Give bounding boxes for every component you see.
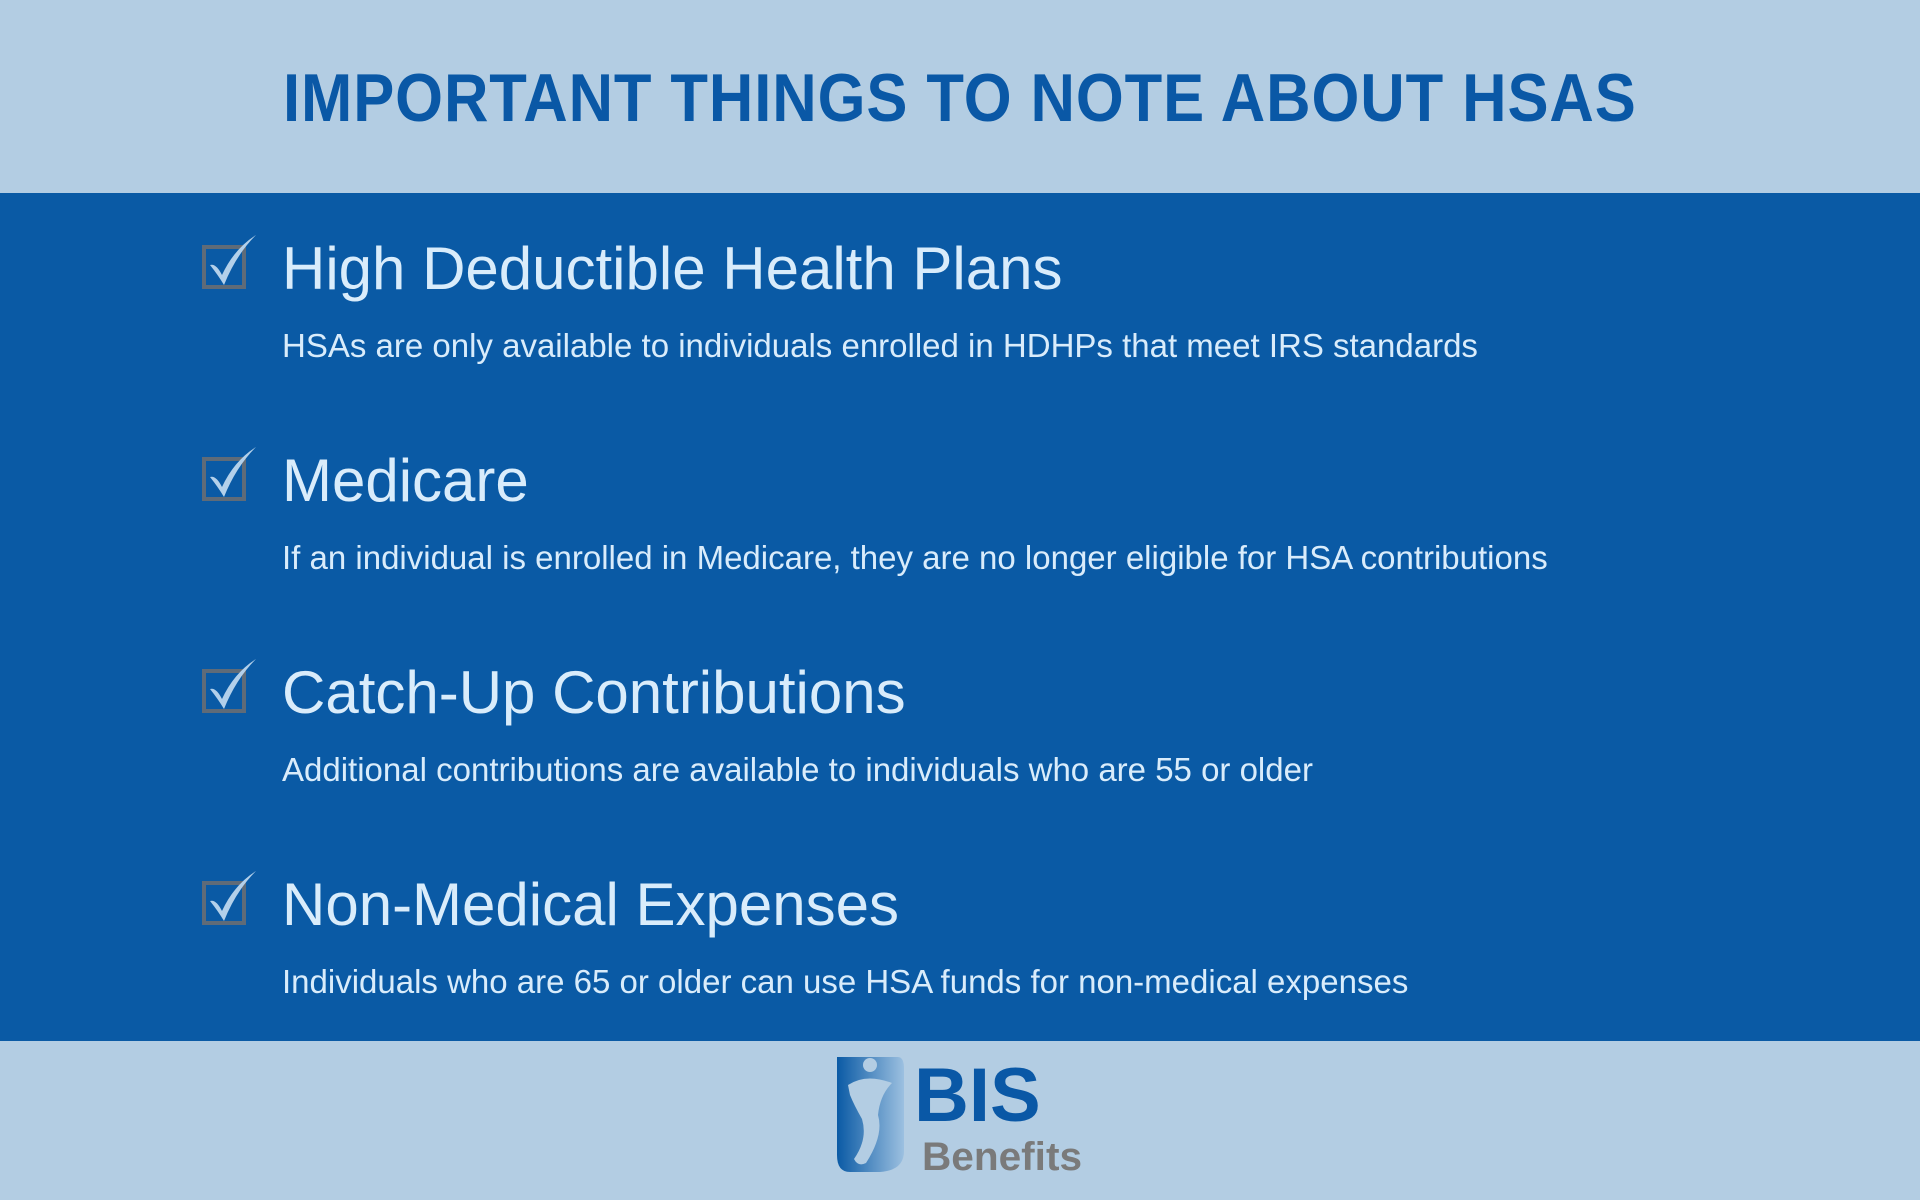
icon: checkbox	[202, 659, 256, 713]
title: IMPORTANT THINGS TO NOTE ABOUT HSAS	[283, 60, 1637, 136]
item 2	[202, 447, 1548, 576]
brand text	[914, 1053, 1082, 1179]
item 4	[202, 871, 1408, 1000]
icon: checkbox	[202, 447, 256, 501]
description: If an individual is enrolled in Medicare, they are no longer eligible for HSA contributions	[282, 539, 1548, 576]
brand text: BIS	[914, 1055, 1041, 1138]
description: HSAs are only available to individuals enrolled in HDHPs that meet IRS standards	[282, 327, 1478, 364]
panel: list	[0, 193, 1920, 1041]
item 1	[202, 235, 1478, 364]
heading: Catch-Up Contributions	[282, 659, 906, 726]
logo	[837, 1055, 1082, 1175]
heading: Non-Medical Expenses	[282, 871, 899, 938]
heading: High Deductible Health Plans	[282, 235, 1062, 302]
icon: checkbox	[202, 871, 256, 925]
heading: Medicare	[282, 447, 529, 514]
item 3	[202, 659, 1313, 788]
icon: checkbox	[202, 235, 256, 289]
icon: shield with figure	[837, 1057, 904, 1172]
description: Additional contributions are available to individuals who are 55 or older	[282, 751, 1313, 788]
description: Individuals who are 65 or older can use HSA funds for non-medical expenses	[282, 963, 1408, 1000]
